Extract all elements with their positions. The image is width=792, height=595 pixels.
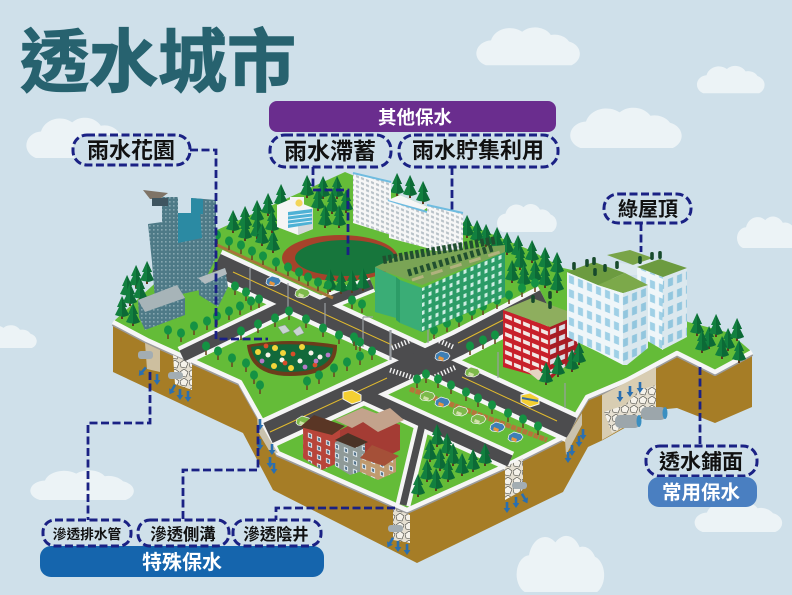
soil block: [113, 322, 752, 563]
banner: 常用保水: [648, 477, 757, 507]
label: 綠屋頂: [604, 194, 691, 223]
flower bed: [247, 341, 337, 376]
parking strip: [410, 389, 547, 440]
blue buildings with green roofs: [567, 250, 687, 365]
label: 滲透排水管: 滲透排水管: [53, 526, 122, 542]
title: 透水城市: [20, 24, 296, 101]
label: 雨水滯蓄: 雨水滯蓄: [284, 138, 376, 164]
tower complex: [138, 190, 228, 330]
infiltration well: [385, 508, 410, 555]
label: 滲透排水管: [43, 520, 131, 546]
permeable paving cross-section: [602, 367, 668, 440]
low building west: [138, 285, 185, 330]
label: 透水鋪面: 透水鋪面: [659, 450, 743, 474]
label: 雨水滯蓄: [270, 135, 391, 167]
second well: [504, 458, 530, 513]
label: 雨水花園: 雨水花園: [87, 138, 175, 163]
lamp posts: [250, 268, 565, 408]
ground surface: [113, 172, 752, 512]
banner: 常用保水: 常用保水: [662, 482, 740, 504]
white apartments: [353, 173, 463, 254]
banner: 特殊保水: [40, 546, 324, 577]
label: 雨水貯集利用: [399, 135, 558, 167]
track field: [282, 235, 398, 281]
green-roof building: [375, 240, 505, 332]
label: 透水鋪面: [646, 446, 757, 476]
dashed leader lines: [88, 150, 700, 520]
parked cars and road vehicles: [266, 276, 539, 442]
label: 雨水花園: [73, 135, 190, 165]
label: 綠屋頂: 綠屋頂: [618, 198, 678, 221]
label: 滲透側溝: [138, 520, 229, 546]
round trees: [164, 230, 542, 435]
infiltration drain vault left: [136, 343, 192, 402]
sidewalks: [182, 264, 572, 505]
brick houses: [300, 408, 404, 480]
hedge strip: [217, 245, 333, 298]
low building east: [198, 268, 228, 307]
label: 雨水貯集利用: 雨水貯集利用: [412, 138, 544, 163]
banner: 特殊保水: 特殊保水: [142, 551, 222, 574]
red building: [503, 291, 586, 385]
school building: [277, 197, 313, 235]
benches: [278, 325, 304, 336]
roads: [182, 264, 572, 505]
infiltration side ditch: [257, 417, 278, 474]
second side ditch: [565, 413, 586, 463]
cone trees: [115, 173, 746, 497]
banner: 其他保水: [269, 101, 556, 132]
label: 滲透陰井: 滲透陰井: [243, 525, 309, 544]
label: 滲透陰井: [233, 520, 321, 546]
label: 滲透側溝: 滲透側溝: [150, 525, 216, 544]
crosswalks: [390, 338, 456, 378]
banner: 其他保水: 其他保水: [378, 107, 452, 128]
